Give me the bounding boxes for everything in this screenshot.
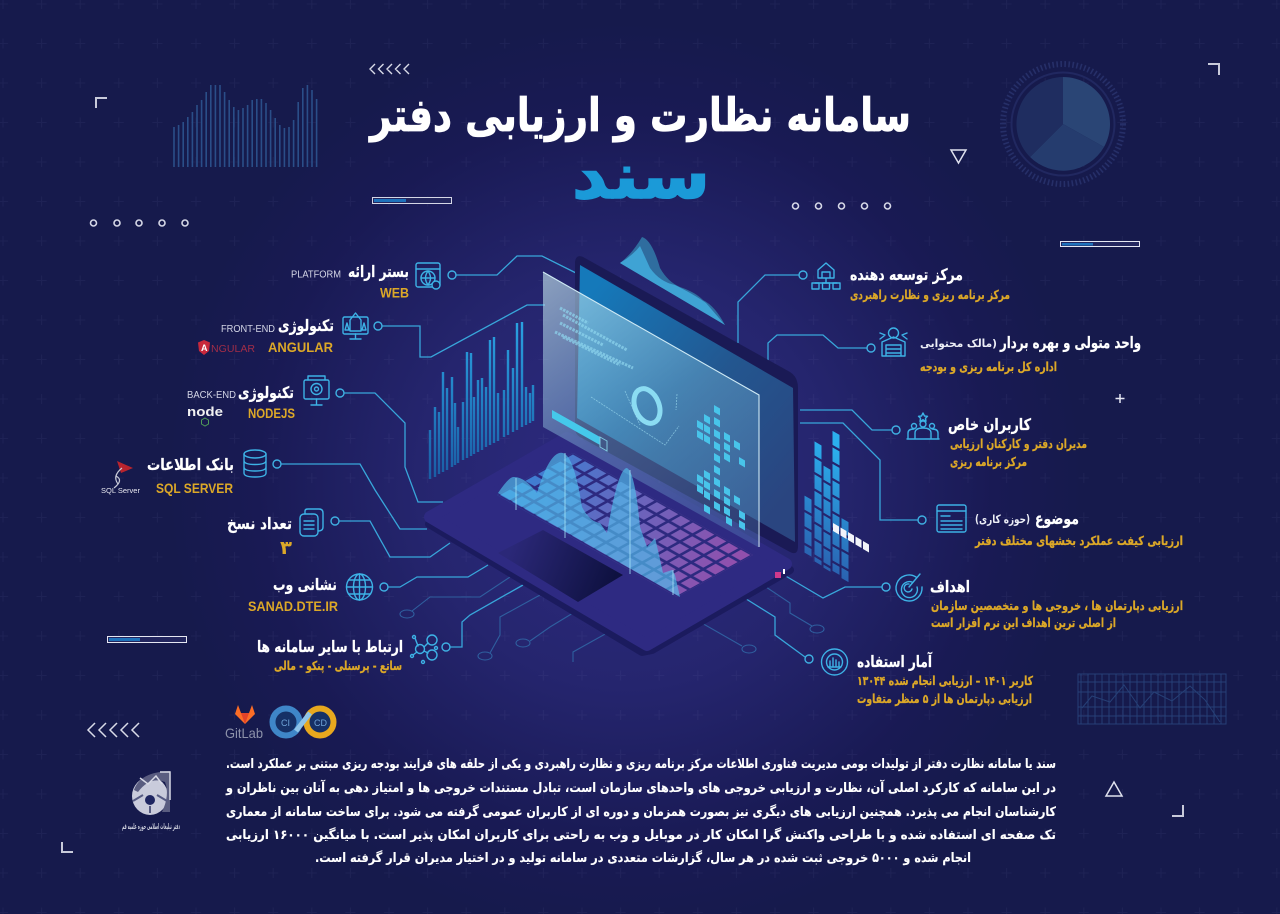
right isometric bar chart	[808, 417, 845, 580]
decorative line chart bottom right	[1078, 674, 1226, 724]
keyboard key grid	[497, 453, 753, 597]
progress bar under title	[372, 198, 452, 204]
description paragraph: تک صفحه ای استفاده شده و با طراحی واکنش گرا امکان کار در موبایل و وب به راحتی برای کاربران امکان پذیر است. با میانگین ۱۶۰۰۰ ارزیابی	[226, 827, 1056, 843]
value: SQL SERVER	[156, 480, 233, 496]
subtext: ارزیابی کیفت عملکرد بخشهای مختلف دفتر	[974, 533, 1183, 548]
logo: node: node	[187, 404, 223, 419]
value: ANGULAR	[268, 339, 333, 355]
heading: تکنولوژی	[278, 316, 334, 335]
plus mark	[1116, 394, 1124, 403]
icon: warehouse globe	[880, 328, 907, 356]
triangle up	[1106, 782, 1122, 796]
item: goals	[896, 574, 1183, 631]
logo: node	[187, 404, 223, 426]
triangle down	[951, 150, 966, 163]
holographic pane	[543, 272, 759, 547]
dots top left	[90, 220, 188, 226]
decorative pie dial top right	[1003, 64, 1123, 184]
laptop screen	[577, 265, 795, 542]
logo: ci cd: CD	[314, 718, 327, 728]
touchpad	[498, 530, 623, 602]
icon: documents	[300, 509, 323, 536]
progress bar right	[1060, 242, 1140, 246]
left isometric bar chart	[430, 322, 533, 479]
pane progress stripe	[552, 410, 600, 445]
value: WEB	[380, 284, 409, 300]
white highlight squares	[833, 523, 869, 552]
logo: sql server	[101, 461, 140, 495]
chevrons top	[370, 64, 409, 74]
laptop ports	[775, 572, 781, 578]
description paragraph: در این سامانه که کارکرد اصلی آن، نظارت و ارزیابی خروجی های واحدهای سازمان است، تبادل مستندات خروجی ها و امتیاز دهی به آنان بین ناظران و	[225, 779, 1056, 796]
heading: آمار استفاده	[857, 651, 932, 671]
icon: network	[410, 635, 438, 664]
icon: web browser	[416, 263, 440, 289]
laptop base side	[429, 524, 790, 652]
heading: ارتباط با سایر سامانه ها	[257, 637, 403, 656]
logo: angular	[198, 340, 255, 355]
corner marks	[62, 64, 1219, 852]
heading: تعداد نسخ	[227, 514, 292, 533]
subtext line 2: از اصلی ترین اهداف این نرم افزار است	[931, 615, 1116, 631]
item: developer	[812, 263, 1010, 302]
subtext line 1: ارزیابی دپارتمان ها ، خروجی ها و متخصصین سازمان	[931, 598, 1183, 613]
title accent: sanad: سند	[572, 140, 710, 214]
icon: monitor castle	[343, 313, 368, 339]
laptop lid	[575, 256, 798, 553]
subtext line 1: کاربر ۱۴۰۱ – ارزیابی انجام شده ۱۳۰۴۴	[857, 673, 1034, 689]
item: integrations	[257, 635, 438, 673]
heading: کاربران خاص	[948, 415, 1032, 434]
logo: gitlab	[225, 705, 263, 741]
dots top right	[792, 203, 890, 209]
icon: globe	[346, 574, 372, 600]
item: front-end	[198, 313, 368, 355]
title: سامانه نظارت و ارزیابی دفتر	[368, 88, 911, 142]
heading: بستر ارائه	[348, 262, 409, 281]
logo: angular: A	[201, 343, 208, 353]
subtext line 2: ارزیابی دپارتمان ها از ۵ منظر متفاوت	[857, 691, 1032, 706]
laptop	[429, 256, 798, 652]
label: PLATFORM	[291, 268, 341, 280]
laptop base	[430, 438, 786, 645]
subtext: ساتع - پرسنلی - پنکو - مالی	[274, 658, 402, 673]
heading: نشانی وب	[273, 575, 337, 594]
item: statistics	[822, 649, 1034, 706]
icon: stats dial	[822, 649, 848, 675]
circuit connector lines	[273, 256, 926, 663]
subtext line 1: مدیران دفتر و کارکنان ارزیابی	[950, 436, 1087, 451]
logo: ci cd	[272, 708, 334, 736]
item: versions	[227, 509, 323, 559]
item: platform	[291, 262, 440, 300]
item: web address	[248, 574, 372, 614]
item: database	[101, 450, 266, 496]
label: BACK-END	[187, 389, 236, 401]
subtext: مرکز برنامه ریزی و نظارت راهبردی	[850, 287, 1010, 302]
description paragraph: سند یا سامانه نظارت دفتر از تولیدات بومی مدیریت فناوری اطلاعات مرکز برنامه ریزی و نظارت راهبردی و یکی از حلقه های فرایند بودجه ریزی مبتنی بر عملکرد است.	[226, 757, 1056, 772]
subtext line 2: مرکز برنامه ریزی	[950, 454, 1027, 469]
heading: تکنولوژی	[238, 383, 294, 402]
value: SANAD.DTE.IR	[248, 598, 338, 614]
item: special users	[907, 413, 1087, 469]
label: FRONT-END	[221, 323, 275, 335]
progress bar left	[108, 636, 186, 642]
decorative bar chart top left	[174, 85, 317, 167]
heading: موضوع	[1035, 509, 1079, 528]
icon: users with stars	[907, 413, 939, 439]
pane text lines	[555, 308, 633, 368]
description paragraph	[225, 757, 1056, 866]
item: owner	[880, 328, 1141, 374]
keyboard wave chart	[498, 453, 680, 597]
logo: sql server: SQL Server	[101, 486, 140, 495]
description paragraph: انجام شده و ۵۰۰۰ خروجی ثبت شده در هر سال، گزارشات متعددی در سامانه تولید و در اختیار مدیران قرار گرفته است.	[315, 850, 971, 866]
logo: angular: NGULAR	[211, 344, 255, 355]
heading: اهداف	[930, 577, 970, 596]
note: (مالک محتوایی	[920, 337, 997, 350]
pane gauge frame	[591, 391, 679, 445]
heading: بانک اطلاعات	[147, 455, 234, 474]
heading: واحد متولی و بهره بردار	[999, 333, 1141, 352]
icon: database	[244, 450, 266, 477]
floating mountain chart	[620, 237, 725, 325]
pane stripe box	[600, 437, 607, 451]
icon: monitor gear	[304, 376, 329, 405]
icon: target	[896, 574, 922, 601]
keyboard	[497, 453, 753, 597]
value: ۳	[280, 537, 292, 559]
note: (حوزه کاری)	[975, 512, 1030, 527]
pane edge highlight	[543, 272, 759, 547]
heading: مرکز توسعه دهنده	[850, 265, 963, 284]
logo: organisation emblem	[122, 771, 180, 831]
logo: ci cd: CI	[281, 718, 290, 728]
description paragraph: کارشناسان انجام می پذیرد. همچنین ارزیابی های دیگری نیز بصورت همزمان و دوره ای از کاربران عمومی گرفته می شود. برای ساخت سامانه از معماری	[226, 804, 1056, 820]
logo: gitlab: GitLab	[225, 725, 263, 741]
chevrons bottom left	[88, 723, 139, 737]
item: back-end	[187, 376, 329, 426]
icon: code window	[937, 505, 966, 532]
subtext: اداره کل برنامه ریزی و بودجه	[920, 359, 1057, 374]
item: subject	[937, 505, 1183, 548]
pane pixel dollar	[697, 405, 745, 530]
text: دفتر تبلیغات اسلامی حوزه علمیه قم	[122, 822, 180, 831]
icon: org chart	[812, 263, 840, 289]
pane donut gauge	[629, 385, 665, 427]
laptop power light	[783, 569, 785, 574]
value: NODEJS	[248, 405, 295, 421]
